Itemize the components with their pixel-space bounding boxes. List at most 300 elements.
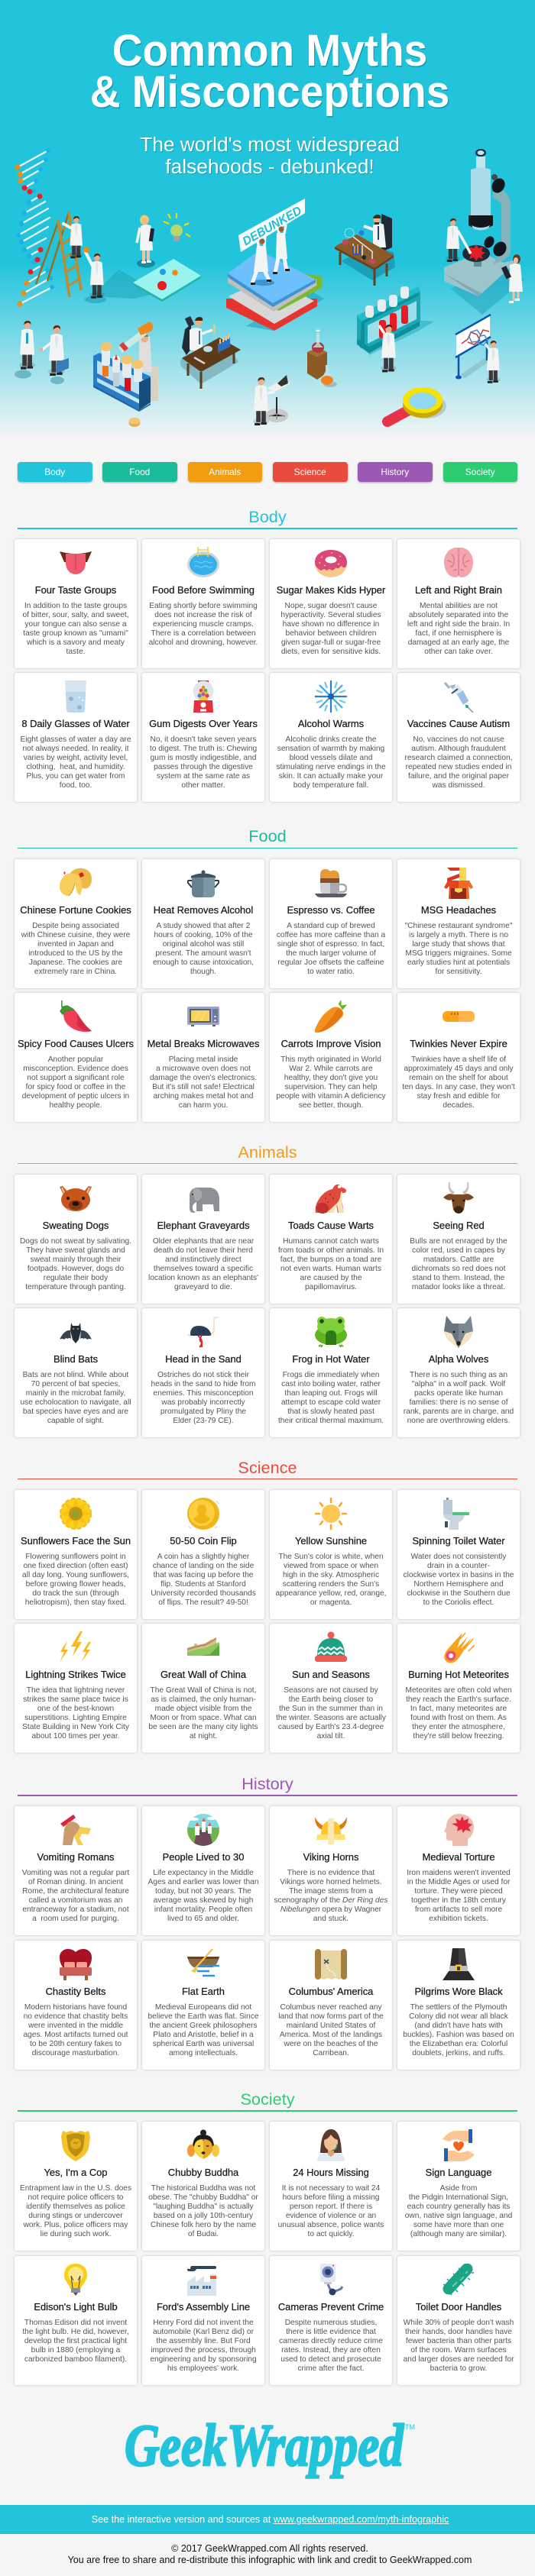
text: for spicy food or coffee in the [26, 1083, 125, 1091]
icon: head with pain [443, 1814, 475, 1846]
text: In addition to the taste groups [24, 602, 127, 610]
text: enemies. This misconception [153, 1389, 254, 1398]
icon: pilgrim hat [443, 1948, 475, 1980]
text: America. Most of the landings [280, 2031, 382, 2039]
text: they reach the Earth's surface. [406, 1695, 511, 1704]
icon: heart bed [60, 1948, 92, 1980]
nav: Animals [188, 462, 262, 482]
text: gum is mostly indigestible, and [151, 754, 256, 762]
woman with clipboard [137, 215, 155, 267]
text [270, 2184, 392, 2239]
text: one of the best-known [37, 1705, 114, 1713]
text: for sensitivity. [436, 968, 481, 976]
text: Vikings wore horned helmets. [280, 1878, 382, 1886]
text [153, 922, 254, 976]
icon: factory [187, 2264, 219, 2296]
text: to digest. The truth is: Chewing [150, 745, 257, 753]
text: color red, used in capes by [412, 1246, 505, 1255]
text: papillomavirus. [305, 1283, 357, 1291]
icon: police badge [60, 2129, 92, 2161]
icon: noodle box [444, 868, 473, 899]
icon: gumball machine [193, 680, 214, 713]
card: Left and Right Brain [397, 539, 520, 667]
text: though. [190, 968, 216, 976]
card: 8 Daily Glasses of Water [15, 673, 137, 802]
text: stand to them. Instead, the [413, 1274, 504, 1282]
card: Viking Horns [270, 1806, 392, 1935]
text: Life expectancy in the Middle [153, 1869, 254, 1877]
icon: meteor [443, 1631, 475, 1663]
text: No, vaccines do not cause [413, 735, 504, 744]
icon: sunflower [60, 1498, 92, 1530]
text: bacteria to grow. [430, 2364, 487, 2373]
text: to be 20th century fakes to [30, 2040, 122, 2048]
title: Carrots Improve Vision [281, 1038, 381, 1049]
text: Medieval Europeans did not [155, 2003, 251, 2012]
text [397, 2003, 520, 2058]
text [142, 1371, 264, 1426]
text: exhibition tickets. [429, 1915, 488, 1923]
card: Frog in Hot Water [270, 1308, 392, 1437]
title: Chastity Belts [46, 1986, 105, 1997]
text: Mental abilities are not [420, 602, 498, 610]
text: Nope, sugar doesn't cause [285, 602, 377, 610]
title: Viking Horns [303, 1851, 358, 1863]
text: sensation of warmth by making [277, 745, 384, 753]
title: Elephant Graveyards [157, 1220, 250, 1231]
icon: pool [187, 547, 219, 577]
title: Heat Removes Alcohol [154, 904, 253, 916]
icon: signing hands [443, 2129, 475, 2161]
text: improved the process, through [151, 2346, 256, 2355]
subtitle: The world's most widespread [140, 133, 400, 156]
card: Spicy Food Causes Ulcers [15, 993, 137, 1121]
text: footpads. However, dogs do [28, 1265, 124, 1273]
text [150, 735, 257, 790]
card: Chastity Belts [15, 1941, 137, 2070]
title: Ford's Assembly Line [157, 2301, 250, 2313]
text [22, 602, 129, 656]
text: promulgated by Pliny the [160, 1408, 246, 1416]
copyright text: You are free to share and re-distribute this infographic with link and credit to GeekWrapped.com [68, 2555, 472, 2565]
text: hours of cooking, 10% of the [154, 931, 253, 939]
icon: frog [315, 1316, 347, 1348]
text: evidence of violence or an [286, 2212, 376, 2220]
text: viewed from space or when [284, 1562, 378, 1570]
text: made object visible from the [155, 1705, 251, 1713]
title: Left and Right Brain [415, 584, 502, 596]
text: land that now forms part of the [278, 2012, 384, 2021]
text: the ancient Greek philosophers [149, 2022, 257, 2030]
card: Cameras Prevent Crime [270, 2256, 392, 2384]
card: Spinning Toilet Water [397, 1490, 520, 1619]
text: the winter. Seasons are actually [276, 1714, 386, 1722]
title: Great Wall of China [160, 1669, 246, 1680]
text [21, 922, 130, 976]
text [270, 2003, 392, 2058]
text: fact, if one hemisphere is [415, 629, 502, 638]
card: Chinese Fortune Cookies [15, 859, 137, 988]
text: damage the oven's electronics. [150, 1074, 257, 1082]
title: Blind Bats [54, 1353, 98, 1365]
subtitle: falsehoods - debunked! [165, 155, 374, 178]
text: none are overthrowing elders. [407, 1417, 510, 1425]
card: Twinkies Never Expire [397, 993, 520, 1121]
text [270, 1371, 392, 1426]
title: 24 Hours Missing [293, 2167, 369, 2178]
text: doublets, jerkins, and ruffs. [412, 2049, 505, 2057]
text: Seasons are not caused by [284, 1686, 378, 1695]
card: Edison's Light Bulb [15, 2256, 137, 2384]
text: Ages and earlier was lower than [148, 1878, 258, 1886]
text: they enter the atmosphere, [412, 1723, 505, 1731]
text: does not increase the risk of [154, 611, 252, 619]
icon: rowing boat [187, 1948, 219, 1980]
text: Carribean. [313, 2049, 349, 2057]
text: of the room. Warm surfaces [410, 2346, 507, 2355]
text: Columbus never reached any [280, 2003, 382, 2012]
card: Sugar Makes Kids Hyper [270, 539, 392, 667]
text [407, 602, 510, 656]
icon: wolf [443, 1316, 475, 1348]
nav: Food: Food [129, 467, 150, 477]
card: Four Taste Groups [15, 539, 137, 667]
text: arching makes metal hot and [154, 1092, 253, 1101]
text: identify themselves as police [26, 2203, 125, 2211]
text: In fact, many meteorites are [410, 1705, 507, 1713]
text: or magenta. [310, 1598, 352, 1607]
icon: bacteria [443, 2264, 475, 2296]
title: Burning Hot Meteorites [408, 1669, 509, 1680]
text: The image stems from a [289, 1887, 373, 1896]
stack of books [226, 250, 324, 331]
text: matador looks like a threat. [412, 1283, 505, 1291]
card: Pilgrims Wore Black [397, 1941, 520, 2070]
card: Great Wall of China [142, 1624, 264, 1752]
category nav buttons [17, 461, 518, 484]
nav: Food [102, 462, 177, 482]
hero illustration [15, 148, 524, 427]
text: cameras directly reduce crime [279, 2337, 383, 2345]
card: Heat Removes Alcohol [142, 859, 264, 988]
text: average was skewed by high [154, 1896, 253, 1905]
text: some have more than one [413, 2221, 504, 2229]
text: which is a savory and meaty [27, 638, 125, 647]
text: War 2. While carrots are [289, 1065, 373, 1073]
card: Elephant Graveyards [142, 1175, 264, 1303]
text: mainland United States of [287, 2022, 375, 2030]
title: & Misconceptions [90, 66, 449, 117]
text [21, 735, 131, 790]
text: It is not necessary to wait 24 [282, 2184, 380, 2193]
text: Eating shortly before swimming [149, 602, 258, 610]
text [150, 1055, 257, 1110]
text: decades. [443, 1101, 475, 1110]
text: bulb in 1880 (employing a [31, 2346, 120, 2355]
card: Metal Breaks Microwaves [142, 993, 264, 1121]
text: This myth originated in World [280, 1055, 381, 1064]
text: infant mortality. People often [154, 1905, 252, 1914]
icon: great wall [187, 1631, 219, 1663]
nav: Animals: Animals [209, 467, 241, 477]
text [142, 2003, 264, 2058]
text: called a vomitorium was an [29, 1896, 122, 1905]
text: there is little evidence that [286, 2328, 376, 2336]
text: fact, the bumps on a toad are [280, 1256, 381, 1264]
teal test tube rack [357, 286, 434, 372]
text: passes through the digestive [154, 763, 253, 771]
text: graveyard to die. [174, 1283, 232, 1291]
text: Humans cannot catch warts [283, 1237, 379, 1246]
text: failure, and the original paper [408, 772, 509, 781]
text: believe the Earth was flat. Since [148, 2012, 258, 2021]
text: matadors. Cattle are [423, 1256, 494, 1264]
text: The Great Wall of China is not, [151, 1686, 256, 1695]
icon: glass of water [65, 680, 86, 713]
text [15, 1553, 137, 1608]
text: used to detect and prosecute [280, 2355, 381, 2364]
text: Thomas Edison did not invent [24, 2319, 127, 2327]
text [270, 1237, 392, 1292]
text: caused by Earth's 23.4-degree [278, 1723, 384, 1731]
card: MSG Headaches [397, 859, 520, 988]
text: body temperature fall. [293, 781, 368, 790]
text: fewer bacteria than other parts [406, 2337, 511, 2345]
heading: Food: Food [248, 826, 287, 845]
text: automobile (Karl Benz did) or [153, 2328, 254, 2336]
text: Japanese. The cookies are [29, 958, 122, 967]
title: Metal Breaks Microwaves [148, 1038, 259, 1049]
text [405, 922, 512, 976]
nav: Science [273, 462, 347, 482]
text: There is no such thing as an [410, 1371, 507, 1379]
card: Head in the Sand [142, 1308, 264, 1437]
title: Chubby Buddha [168, 2167, 238, 2178]
text: among intellectuals. [169, 2049, 238, 2057]
text: that was facing up before the [154, 1571, 253, 1579]
text: strikes the same place twice is [23, 1695, 128, 1704]
text: early studies hint at potentials [407, 958, 510, 967]
text [397, 2319, 520, 2374]
card: Toads Cause Warts [270, 1175, 392, 1303]
text: was probably incorrectly [161, 1398, 245, 1407]
title: Gum Digests Over Years [149, 718, 258, 729]
text: bat species have eyes and are [23, 1408, 128, 1416]
icon: sun [315, 1498, 347, 1530]
text [15, 1371, 137, 1426]
text: during stings or undercover [28, 2212, 123, 2220]
molecule plate [133, 259, 201, 302]
text: entranceway for a stadium, not [22, 1905, 129, 1914]
title: Sugar Makes Kids Hyper [277, 584, 385, 596]
text: research claimed a connection, [404, 754, 512, 762]
text: healthy people. [49, 1101, 102, 1110]
text: But it's still not safe! Electrical [152, 1083, 255, 1091]
text: behavior between children [286, 629, 376, 638]
text: The Sun's color is white, when [278, 1553, 384, 1561]
title: MSG Headaches [421, 904, 496, 916]
text: misconception. Evidence does [23, 1065, 128, 1073]
text: axial tilt. [317, 1732, 345, 1740]
text: diets, even for sensitive kids. [281, 648, 381, 656]
nav: Body: Body [44, 467, 65, 477]
icon: brain [444, 547, 473, 577]
icon: winter hat [315, 1631, 347, 1663]
text [270, 1553, 392, 1608]
text: death do not leave their herd [154, 1246, 253, 1255]
text: State Building in New York City [22, 1723, 129, 1731]
text: the much larger volume of [286, 949, 376, 958]
text: taste group known as "umami" [23, 629, 128, 638]
text: appearance yellow, red, orange, [275, 1589, 387, 1598]
icon: security camera [315, 2264, 347, 2296]
text: own, native sign language, and [405, 2212, 512, 2220]
text: flip. Students at Stanford [160, 1580, 246, 1589]
hero gradient background [0, 0, 535, 458]
text: Meteorites are often cold when [405, 1686, 512, 1695]
text: hours before filing a missing [283, 2193, 379, 2202]
text: person report. If there is [290, 2203, 372, 2211]
text: large study that shows that [412, 940, 505, 949]
text [397, 1869, 520, 1924]
nav: Science: Science [294, 467, 326, 477]
text: together in the 18th century [411, 1896, 506, 1905]
title: Sign Language [426, 2167, 491, 2178]
icon: twinkie [443, 1011, 475, 1022]
text: ten days. In any case, they won't [402, 1083, 515, 1091]
title: Lightning Strikes Twice [25, 1669, 126, 1680]
text: your tongue can also sense a [24, 620, 127, 629]
text: clockwise vortex in basins in the [404, 1571, 514, 1579]
text: are caused by the [300, 1274, 362, 1282]
text: families: there is no sense of [409, 1398, 508, 1407]
text: taste. [66, 648, 85, 656]
text [397, 2184, 520, 2239]
text: "Chinese restaurant syndrome" [405, 922, 512, 930]
text: Another popular [48, 1055, 103, 1064]
text: absolutely separated into the [409, 611, 508, 619]
text: obese. The "chubby Buddha" or [148, 2193, 258, 2202]
text: A standard cup of brewed [287, 922, 375, 930]
text: hyperactivity. Several studies [280, 611, 381, 619]
text: a room used for purging. [32, 1915, 119, 1923]
text [15, 1869, 137, 1924]
text: torture. They were pieced [414, 1887, 503, 1896]
card: Burning Hot Meteorites [397, 1624, 520, 1752]
title: Spicy Food Causes Ulcers [18, 1038, 134, 1049]
card: Sunflowers Face the Sun [15, 1490, 137, 1619]
text: rates. Instead, they are often [281, 2346, 381, 2355]
text [277, 922, 385, 976]
copyright text [2, 2543, 535, 2566]
text [148, 1237, 258, 1291]
text: repeated new studies ended in [406, 763, 511, 771]
text [142, 2319, 264, 2374]
card: People Lived to 30 [142, 1806, 264, 1935]
card: Vomiting Romans [15, 1806, 137, 1935]
icon: microwave [187, 1007, 219, 1026]
icon: fortune cookies [60, 868, 92, 897]
text: rank, parents are in charge, and [404, 1408, 514, 1416]
icon: ostrich [187, 1316, 219, 1348]
text: MSG triggers migraines. Some [405, 949, 512, 958]
text [15, 1686, 137, 1741]
icon: donut [315, 550, 347, 577]
text: from artifacts to sell more [415, 1905, 502, 1914]
text: Bulls are not enraged by the [410, 1237, 507, 1246]
text: coffee has more caffeine than a [277, 931, 385, 939]
card: Vaccines Cause Autism [397, 673, 520, 802]
text: lived to 65 and older. [167, 1915, 239, 1923]
text: not always needed. In reality, it [22, 745, 129, 753]
icon: roman helmet [60, 1814, 92, 1846]
text: alcohol and drowning, however. [149, 638, 258, 647]
text: heads in the sand to hide from [151, 1380, 256, 1388]
card: Columbus' America [270, 1941, 392, 2070]
nav: Society [443, 462, 517, 482]
text: use echolocation to navigate, all [20, 1398, 131, 1407]
text: the assembly line. But Ford [156, 2337, 251, 2345]
card: Sun and Seasons [270, 1624, 392, 1752]
text: original alcohol was still [163, 940, 244, 949]
text: about 100 times per year. [32, 1732, 119, 1740]
text: themselves toward a specific [154, 1265, 253, 1273]
title: Vaccines Cause Autism [407, 718, 510, 729]
title: Food Before Swimming [152, 584, 255, 596]
text: Henry Ford did not invent the [153, 2319, 254, 2327]
text [276, 1055, 386, 1110]
text: can harm you. [179, 1101, 228, 1110]
card: Sweating Dogs [15, 1175, 137, 1303]
copyright text: © 2017 GeekWrapped.com All rights reserved. [171, 2543, 368, 2554]
text: cast into boiling water, rather [281, 1380, 381, 1388]
DNA helix [15, 148, 54, 307]
text: blood vessels dilate and [290, 754, 372, 762]
heading: History: History [242, 1774, 293, 1793]
title: Sun and Seasons [292, 1669, 370, 1680]
text: "laughing Buddha" is actually [153, 2203, 254, 2211]
text [397, 1553, 520, 1608]
flasks on brown box [307, 330, 337, 387]
icon: tongue [60, 551, 92, 574]
text: clockwise in the Southern due [407, 1589, 511, 1598]
text: work. Plus, police officers may [24, 2221, 128, 2229]
title: 50-50 Coin Flip [170, 1535, 237, 1547]
title: Toilet Door Handles [416, 2301, 501, 2313]
text: buckles). Fashion was based on [403, 2031, 514, 2039]
text: drain in a counter- [427, 1562, 490, 1570]
text [15, 2319, 137, 2364]
text: before growing flower heads, [26, 1580, 125, 1589]
text: scattering renders the Sun's [283, 1580, 379, 1589]
icon: toilet [443, 1498, 475, 1530]
text: development of peptic ulcers in [22, 1092, 129, 1101]
text: Nibelungen opera by Wagner [280, 1905, 381, 1914]
debunked sign with two scientists: DEBUNKED [241, 204, 304, 248]
title: Sweating Dogs [43, 1220, 109, 1231]
text: A coin has a slightly higher [157, 1553, 249, 1561]
icon: lightning [60, 1631, 92, 1663]
icon: syringe [444, 682, 474, 713]
text: Older elephants that are near [153, 1237, 254, 1246]
card: Gum Digests Over Years [142, 673, 264, 802]
icon: light bulb [60, 2264, 92, 2296]
text [22, 1055, 129, 1110]
text [270, 1686, 392, 1741]
text: Placing metal inside [169, 1055, 238, 1064]
text [280, 602, 381, 656]
text: Twinkies have a shelf life of [411, 1055, 506, 1064]
